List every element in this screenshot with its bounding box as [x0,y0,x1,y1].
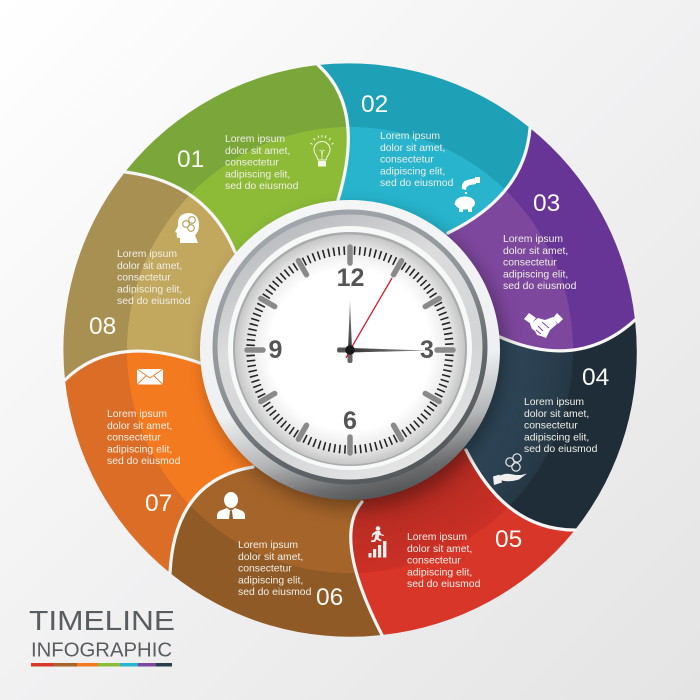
number 05: 05 [495,526,522,553]
number 08: 08 [89,313,116,340]
clock rim line [233,232,467,466]
segment shape 01 [125,65,350,350]
text block 03: sed do eiusmod [503,281,577,292]
icon: light bulb [310,135,334,166]
text block 06: adipiscing elit, [238,575,303,586]
segment shape 06 [170,350,382,637]
heading: TIMELINE: TIMELINE [29,605,175,636]
text block 05: Lorem ipsum [407,532,467,543]
number 07: 07 [145,490,172,517]
panel: segment 01 green [125,65,350,350]
icon: hand with gears [493,454,527,485]
segment shape 07 [65,350,350,573]
panel: segment 05 red [350,350,575,635]
segment shape 03 [350,128,635,351]
clock bezel [218,214,482,480]
text block 07: dolor sit amet, [107,421,172,432]
minute ticks [250,250,450,450]
clock numerals [269,264,434,435]
panel: segment 08 tan [63,172,350,380]
segment separators [65,65,635,635]
text block 03: dolor sit amet, [503,246,568,257]
segment shape 02 [318,63,530,350]
text block 08: dolor sit amet, [117,261,182,272]
text block 07: adipiscing elit, [107,444,172,455]
rainbow bar [31,663,172,666]
panel: segment 07 orange [65,350,350,573]
clock outer disc [200,200,500,500]
text block 04: adipiscing elit, [524,432,589,443]
text block 04: dolor sit amet, [524,409,589,420]
clock numerals: 3 [420,336,434,364]
number 03: 03 [533,190,560,217]
text block 05: sed do eiusmod [407,579,481,590]
panel: segment 04 dark slate [350,320,637,530]
number 06: 06 [316,584,343,611]
segment shape 05 [350,350,575,635]
icon: envelope [137,369,163,384]
number 01: 01 [177,146,204,173]
segment shape 04 [350,320,637,530]
text block 01: adipiscing elit, [225,169,290,180]
text block 01: sed do eiusmod [225,181,299,192]
number 04: 04 [582,364,609,391]
clock [200,200,500,500]
title [29,605,175,666]
text block 02: dolor sit amet, [380,143,445,154]
text block 07: sed do eiusmod [107,456,181,467]
text block 03: Lorem ipsum [503,234,563,245]
clock numerals: 9 [269,336,282,364]
text block 08: Lorem ipsum [117,249,177,260]
text block 04: sed do eiusmod [524,444,598,455]
clock numerals: 6 [343,407,357,435]
text block 04: Lorem ipsum [524,397,584,408]
panel: segment 03 purple [350,128,635,351]
icon: head with gears [175,213,199,243]
segment shape 08 [63,172,350,380]
text block 08: sed do eiusmod [117,296,191,307]
text block 05: dolor sit amet, [407,544,472,555]
number 02: 02 [361,91,388,118]
icon: runner on rising bars [368,526,386,558]
icon: handshake [524,313,563,338]
heading: INFOGRAPHIC: INFOGRAPHIC [31,638,172,662]
text block 02: adipiscing elit, [380,166,445,177]
text block 03: consectetur [503,258,557,268]
panel: segment 02 teal [318,63,530,350]
text block 06: consectetur [238,564,292,574]
hour marks [247,247,453,453]
text block 02: consectetur [380,154,434,166]
text block 01: dolor sit amet, [225,146,290,157]
text block 07: Lorem ipsum [107,409,167,420]
text block 06: Lorem ipsum [238,540,298,551]
text block 06: dolor sit amet, [238,552,303,563]
clock face [235,234,465,464]
clock hands [337,278,428,363]
text block 05: adipiscing elit, [407,567,472,578]
text block 06: sed do eiusmod [238,587,312,598]
icon: businessman [217,492,245,519]
text block 03: adipiscing elit, [503,269,568,280]
text block 04: consectetur [524,420,578,432]
clock numerals: 12 [337,264,364,292]
text block 01: Lorem ipsum [225,134,285,145]
icon: hand and piggy bank [454,177,480,212]
text block 08: consectetur [117,272,171,284]
clock white rim [228,226,472,470]
hub shadow [206,208,506,508]
text block 07: consectetur [107,432,161,444]
text block 02: Lorem ipsum [380,131,440,142]
text block 05: consectetur [407,556,461,566]
panel: segment 06 brown [170,350,382,637]
text block 01: consectetur [225,158,279,168]
clock metal ring [212,210,488,484]
text block 08: adipiscing elit, [117,284,182,295]
text block 02: sed do eiusmod [380,178,454,189]
